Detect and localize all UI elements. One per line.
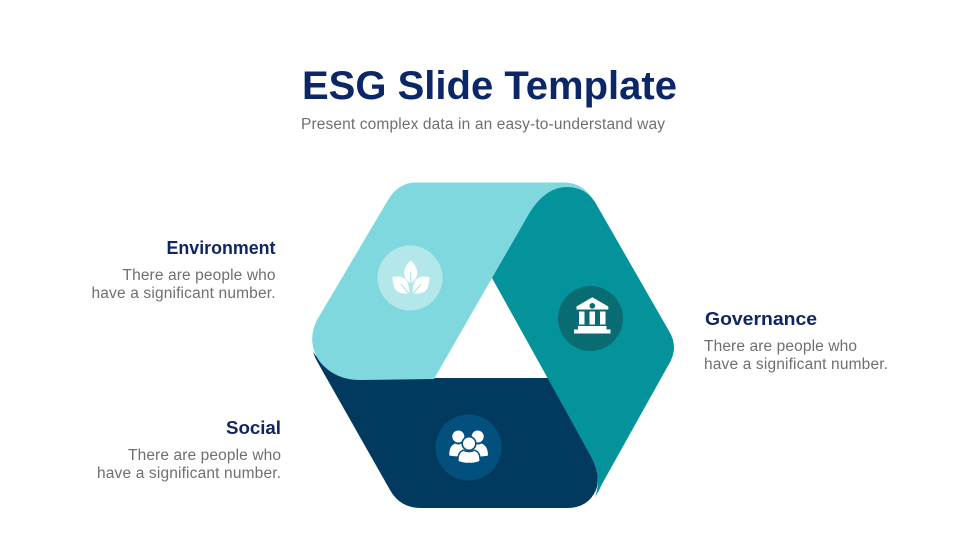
text block: environment: There are people who [122,267,276,284]
text block: governance: have a significant number. [704,356,888,373]
panel: environment ribbon segment [312,182,592,380]
title: ESG Slide Template [302,64,677,108]
text block: social: Social [226,417,281,438]
panel: social ribbon segment [313,352,598,508]
text block: governance: Governance [705,308,817,329]
text block: environment: Environment [166,237,276,258]
text block: governance: There are people who [704,338,857,355]
text block: governance [704,308,888,373]
subtitle: Present complex data in an easy-to-understand way [301,116,665,133]
icon: environment leaves [378,246,442,310]
hexagon ribbon diagram [312,182,674,508]
text block: environment [92,237,276,302]
text block: social: have a significant number. [97,465,281,482]
text block: social [97,417,281,482]
icon: governance building [558,286,623,351]
icon: social people group [436,414,502,480]
text block: environment: have a significant number. [92,285,276,302]
panel: governance ribbon segment [492,187,674,497]
text block: social: There are people who [128,447,281,464]
